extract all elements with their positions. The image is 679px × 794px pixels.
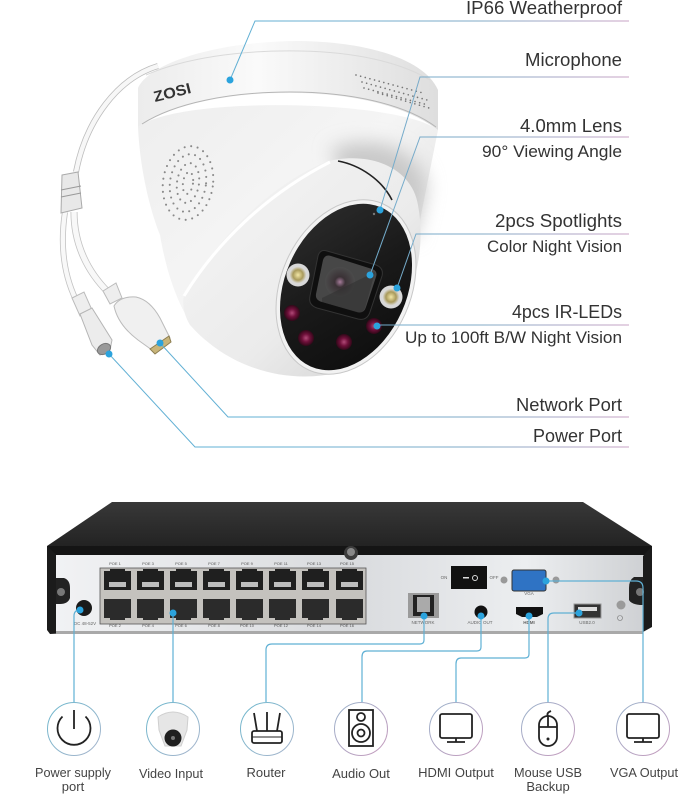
icon: mouse USB backup: [514, 702, 582, 794]
PoE ports: POE 4: [142, 623, 155, 628]
callout: Spotlights: [394, 211, 629, 292]
callout: 4.0mm Lens: 4.0mm Lens: [520, 116, 622, 136]
icon: mouse USB backup: Mouse USB: [514, 765, 582, 780]
PoE ports: POE 1: [109, 561, 122, 566]
icon: router: Router: [246, 765, 286, 780]
power jack: DC 48-52V: [74, 621, 96, 626]
PoE ports: POE 2: [109, 623, 122, 628]
microphone vents: [356, 75, 429, 108]
VGA port: VGA: [524, 591, 534, 596]
PoE ports: POE 12: [274, 623, 289, 628]
audio port: [467, 606, 493, 625]
USB port: USB2.0: [579, 620, 595, 625]
icon: HDMI output: [418, 702, 494, 780]
power switch: OFF: [490, 575, 499, 580]
callout: Spotlights: 2pcs Spotlights: [495, 211, 622, 231]
camera ball housing: [183, 158, 421, 377]
connector: VGA output: [542, 578, 643, 702]
lens module: [310, 251, 382, 319]
icon: audio out: Audio Out: [332, 766, 390, 781]
callout: Power Port: [106, 350, 629, 447]
HDMI port: [516, 607, 543, 625]
connector: HDMI output: [456, 612, 532, 702]
connector: power supply: [74, 606, 84, 702]
PoE ports: POE 10: [240, 623, 255, 628]
callout: Microphone: [376, 50, 629, 214]
IR LEDs: [284, 305, 300, 321]
icon: mouse USB backup: Backup: [526, 779, 570, 794]
PoE ports: POE 5: [175, 561, 188, 566]
connector: router: [266, 612, 428, 702]
ground screw: [616, 600, 626, 620]
camera cables: [61, 66, 171, 357]
callout: IR LEDs: [374, 302, 629, 347]
spotlights: [286, 264, 310, 286]
PoE ports: POE 7: [208, 561, 221, 566]
connector: USB: [548, 610, 582, 702]
icon: video input: [139, 702, 203, 781]
icon: power supply port: Power supply: [35, 765, 111, 780]
audio port: AUDIO OUT: [467, 620, 493, 625]
network port: NETWORK: [412, 620, 434, 625]
icon: VGA output: [610, 702, 678, 780]
PoE ports: POE 14: [307, 623, 322, 628]
PoE ports: POE 6: [175, 623, 188, 628]
callout: IR LEDs: 4pcs IR-LEDs: [512, 302, 622, 322]
icon: VGA output: VGA Output: [610, 765, 678, 780]
callout: Microphone: Microphone: [525, 50, 622, 70]
power switch: [441, 566, 499, 589]
speaker holes: [158, 143, 218, 223]
camera top cap: [138, 41, 438, 130]
callout: 4.0mm Lens: [366, 116, 629, 278]
PoE ports: POE 3: [142, 561, 155, 566]
callout: Network Port: Network Port: [516, 395, 622, 415]
PoE ports: POE 15: [340, 561, 355, 566]
callout: IR LEDs: Up to 100ft B/W Night Vision: [405, 328, 622, 347]
HDMI port: HDMI: [523, 620, 535, 625]
power jack: [74, 600, 96, 626]
callout: 4.0mm Lens: 90° Viewing Angle: [482, 142, 622, 161]
icon: power supply port: [35, 702, 111, 794]
icon: router: [240, 702, 294, 780]
PoE ports: POE 8: [208, 623, 221, 628]
connector: video input: [170, 610, 176, 702]
USB port: [574, 604, 601, 625]
PoE ports: POE 13: [307, 561, 322, 566]
PoE ports: POE 11: [274, 561, 289, 566]
network port: [408, 593, 439, 625]
PoE ports: POE 16: [340, 623, 355, 628]
icon: HDMI output: HDMI Output: [418, 765, 494, 780]
icon: video input: Video Input: [139, 766, 203, 781]
icon: audio out: [332, 702, 390, 781]
camera face: [250, 177, 442, 397]
connector: audio out: [362, 612, 484, 702]
icon: power supply port: port: [62, 779, 85, 794]
VGA port: [500, 570, 560, 596]
PoE ports: POE 9: [241, 561, 254, 566]
callout: IP66 Weatherproof: [226, 0, 629, 84]
logo: ZOSI: [152, 80, 193, 106]
callout: Spotlights: Color Night Vision: [487, 237, 622, 256]
PoE ports: [100, 561, 366, 628]
camera body: [138, 41, 442, 397]
callout: Power Port: Power Port: [533, 426, 622, 446]
power switch: ON: [441, 575, 447, 580]
callout: Network Port: [156, 340, 629, 417]
NVR recorder: [47, 502, 652, 634]
